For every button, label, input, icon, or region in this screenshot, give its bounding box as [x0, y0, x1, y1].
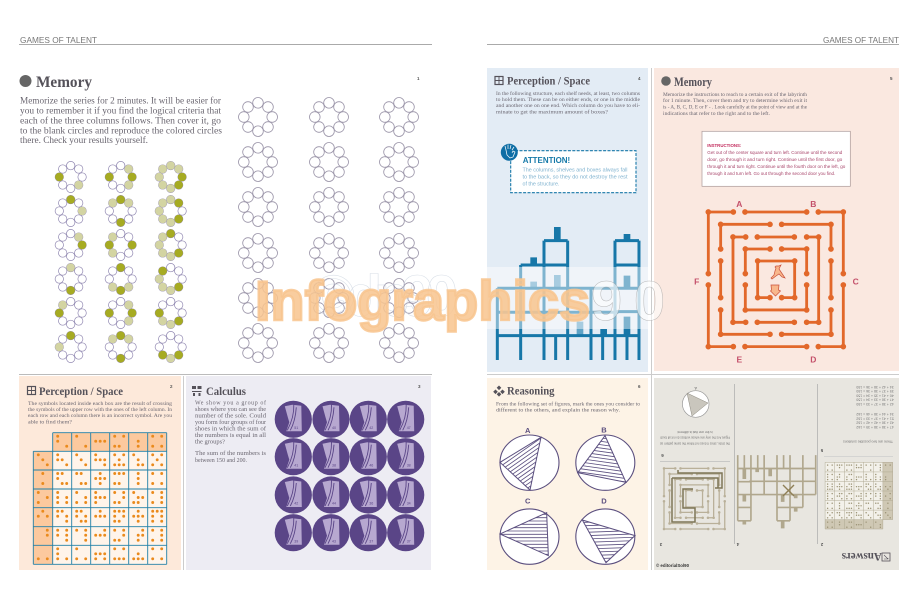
shoe sole circles: 42 — [294, 502, 298, 506]
calculus instructions text — [195, 400, 267, 464]
perception instructions text: The symbols located inside each box are the result of crossing — [28, 400, 172, 407]
answer numbers upside down: 51 + 41 + 37 + 33 = 162 — [856, 416, 894, 420]
instructions box: Get out of the center square and turn left. Continue until the second — [707, 150, 843, 155]
labyrinth instructions text: for 1 minute. Then, cover them and try to determine which exit it — [663, 97, 807, 104]
panel: perception space right — [487, 68, 648, 372]
answer labels: 5 — [820, 448, 823, 453]
heading: perception space: Perception / Space — [507, 76, 590, 88]
panel: calculus — [186, 376, 431, 570]
perception instructions text: the symbols of the upper row with the ones of the left column. In — [28, 406, 172, 413]
heading: memory: Memory — [674, 75, 713, 89]
panel: memory series — [20, 74, 420, 363]
answer numbers upside down: 39 + 37 + 38 + 36 = 150 — [856, 389, 894, 393]
calculus instructions text: The sum of the numbers is — [195, 450, 267, 457]
shoe sole circles: 51 — [294, 426, 298, 430]
heading: reasoning: Reasoning — [507, 386, 555, 398]
page number 6: 6 — [638, 384, 641, 389]
shoe sole circles — [275, 401, 424, 551]
memory instructions text: there. Check your results yourself. — [20, 135, 148, 146]
exit letters: C — [853, 276, 859, 286]
instructions box: door, go through it and turn right. Continue until the first door, go — [707, 157, 843, 162]
reasoning instructions text: different to the others, and explain the reason why. — [496, 406, 621, 414]
shoe sole circles: 43 — [332, 539, 336, 543]
answer: triangle figure — [682, 386, 709, 417]
perception instructions text — [28, 400, 172, 426]
shoe sole circles: 38 — [332, 463, 336, 467]
memory instructions text: Memorize the series for 2 minutes. It will be easier for — [20, 96, 222, 106]
attention body — [522, 168, 628, 188]
publisher logo: © editorialSol90 — [656, 562, 689, 569]
attention body: of the structure. — [522, 182, 560, 188]
figures A B C D: C — [525, 496, 531, 506]
calculus instructions text: We show you a group of — [195, 400, 266, 406]
right page header: GAMES OF TALENT — [823, 36, 899, 45]
answer labels: 4 — [736, 542, 739, 547]
icon: diamond dots — [493, 386, 505, 397]
calculus instructions text: the numbers is equal in all — [195, 433, 266, 439]
page number 3: 3 — [418, 384, 421, 389]
memory instructions text — [20, 96, 222, 146]
exit letters: E — [736, 354, 742, 364]
answer numbers upside down: 40 + 41 + 35 + 34 = 150 — [856, 394, 894, 398]
structure instructions text: minate to get the maximum amount of boxes? — [496, 108, 609, 116]
page number 5: 5 — [890, 76, 893, 81]
answer: structure — [737, 455, 816, 528]
answer labels: 6 — [661, 453, 664, 458]
answer numbers upside down: 42 + 36 + 42 + 42 = 162 — [856, 420, 894, 424]
memory instructions text: you to remember it if you find the logical criteria that — [20, 106, 221, 116]
shoe sole circles: 41 — [294, 463, 298, 467]
answer numbers upside down: 42 + 38 + 37 + 33 = 150 — [856, 402, 894, 406]
shoe sole circles: 39 — [294, 539, 298, 543]
labyrinth — [708, 212, 843, 347]
structure instructions text: to hold them. These can be on either ends, or one in the middle — [496, 97, 641, 103]
exit letters: A — [736, 199, 742, 209]
reasoning instructions text — [496, 400, 640, 414]
heading: answers upside down: Answers — [841, 550, 882, 562]
attention body: to the back, so they do not destroy the rest — [522, 174, 628, 180]
instructions box: INSTRUCTIONS: — [707, 143, 742, 148]
shelf structure — [496, 227, 640, 360]
watermark: Infographics — [255, 269, 590, 332]
figures A B C D: A — [525, 426, 531, 435]
perception instructions text: each row and each column there is an incorrect symbol. Are you — [28, 413, 172, 419]
calculus instructions text: the groups? — [195, 440, 225, 446]
figures A B C D: B — [601, 426, 607, 434]
labyrinth instructions text: indications that refer to the right and to the left. — [663, 110, 771, 117]
shoe sole circles: 44 — [332, 502, 336, 506]
answer labels — [659, 448, 823, 547]
answer numbers upside down: There are two possible solutions — [843, 440, 893, 444]
exit letters — [694, 199, 859, 364]
calculus instructions text: shoes in which the sum of — [195, 426, 266, 432]
exit letters: D — [810, 354, 816, 364]
icon: running figure — [770, 265, 785, 296]
exit letters: F — [694, 276, 699, 286]
answer numbers upside down: 34 + 42 + 38 + 36 = 150 — [856, 385, 894, 389]
attention body: The columns, shelves and boxes always fall — [522, 168, 628, 174]
perception instructions text: able to find them? — [28, 418, 72, 426]
watermark: 90 — [591, 269, 665, 332]
shoe sole circles: 36 — [369, 502, 373, 506]
colored circle series — [55, 161, 186, 363]
memory instructions text: to the blank circles and reproduce the colored circles — [20, 126, 222, 136]
structure instructions text: In the following structure, each shelf needs, at least, two columns — [496, 90, 640, 97]
page number 1: 1 — [417, 76, 420, 81]
attention callout — [501, 144, 636, 193]
answer labels: 3 — [659, 542, 662, 547]
calculus instructions text: you form four groups of four — [195, 419, 266, 426]
answer: symbol grid — [825, 462, 893, 529]
shoe sole circles: 46 — [369, 463, 373, 467]
icon: perception grid — [495, 76, 503, 84]
shoe sole circles: 38 — [407, 463, 411, 467]
calculus instructions text: number of the sole. Could — [195, 412, 266, 420]
heading: calculus: Calculus — [206, 386, 246, 398]
figures A B C D — [499, 428, 636, 565]
panel: reasoning — [487, 378, 648, 570]
answer text upside down: the circle, since it does not follow the same pattern as — [660, 442, 730, 446]
shoe sole circles: 47 — [407, 426, 411, 430]
answer numbers upside down: 47 + 38 + 38 + 39 = 162 — [856, 425, 894, 429]
exit letters: B — [810, 199, 816, 209]
shoe sole circles: 42 — [369, 426, 373, 430]
answer numbers upside down: 34 + 44 + 38 + 46 = 162 — [856, 412, 894, 416]
page number 4: 4 — [638, 76, 641, 81]
answer text upside down — [660, 430, 730, 446]
instructions box — [702, 131, 850, 186]
page number 2: 2 — [170, 384, 173, 389]
shoe sole circles: 37 — [407, 539, 411, 543]
symbol grid — [33, 433, 167, 564]
calculus instructions text: between 150 and 200. — [195, 458, 247, 464]
instructions box: through it and turn left. Go out through the second door you find. — [707, 171, 835, 176]
answer numbers upside down: 47 + 36 + 33 + 34 = 150 — [856, 398, 894, 402]
labyrinth instructions text: is - A, B, C, D, E or F - . Look carefully at the point of view and at the — [663, 104, 807, 110]
shoe sole circles: 34 — [407, 502, 411, 506]
instructions box: through it and turn right. Continue until the fourth door on the left, go — [707, 164, 846, 169]
icon: calculus — [192, 386, 202, 396]
answer: triangle figure: A — [694, 386, 697, 390]
labyrinth instructions text — [663, 91, 807, 117]
shoe sole circles: 40 — [332, 426, 336, 430]
panel: answers — [654, 378, 899, 570]
reasoning instructions text: From the following set of figures, mark the ones you consider to — [496, 400, 640, 408]
heading: perception space: Perception / Space — [39, 386, 123, 398]
shoe sole circles: 37 — [369, 539, 373, 543]
answer: labyrinth — [664, 468, 725, 529]
heading: memory: Memory — [36, 74, 92, 91]
structure instructions text: and another one on one end. Which column do you have to eli- — [496, 103, 640, 109]
icon: memory dot — [20, 75, 32, 87]
watermark: ©dp90 — [312, 264, 458, 329]
structure instructions text — [496, 90, 641, 116]
blank circle series — [238, 98, 418, 362]
icon: perception grid — [28, 386, 36, 394]
answer text upside down: is the one that is different — [677, 430, 712, 434]
figures A B C D: D — [601, 496, 607, 506]
calculus instructions text: shoes where you can see the — [195, 407, 266, 413]
labyrinth instructions text: Memorize the instructions to reach to a certain exit of the labyrinth — [663, 91, 807, 98]
icon: hand — [501, 144, 518, 161]
attention title: ATTENTION! — [523, 155, 570, 165]
memory instructions text: each of the three columns follows. Then cover it, go — [20, 116, 221, 126]
panel: perception space left — [19, 376, 181, 570]
panel: memory labyrinth — [654, 68, 899, 371]
answer numbers upside down — [843, 385, 894, 444]
left page header: GAMES OF TALENT — [20, 36, 97, 45]
answer labels: 2 — [820, 542, 823, 547]
answer text upside down: Figure A is the only one whose vertices do not all touch — [660, 436, 730, 440]
icon: memory dot — [661, 76, 671, 86]
